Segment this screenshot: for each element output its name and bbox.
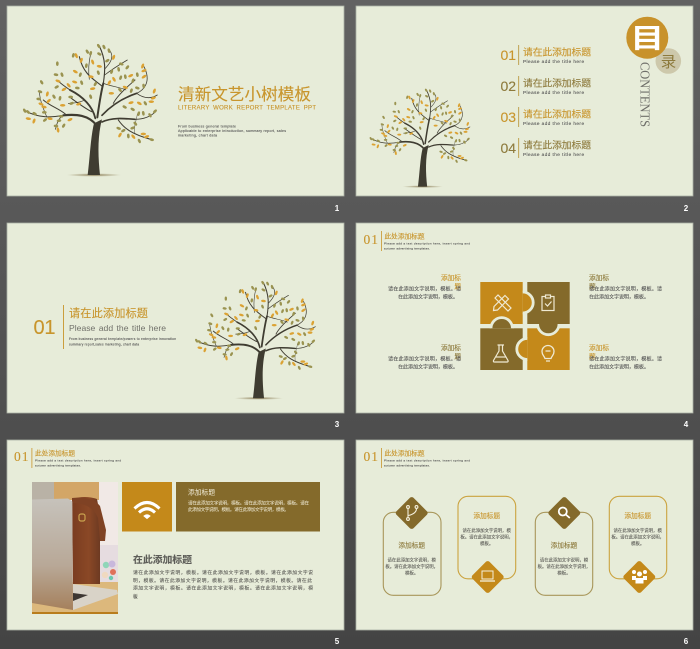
slide 6: four cards xyxy=(356,440,693,630)
tree illustration xyxy=(22,43,158,177)
card 3 xyxy=(535,496,593,595)
description text: Applicable to enterprise introduction, summary report, sales xyxy=(178,129,286,133)
tree illustration xyxy=(369,88,470,188)
card 2: 添加标题 xyxy=(473,511,500,520)
card 1: 板。请在此添加文字说明， xyxy=(385,563,438,570)
contents item 02 xyxy=(500,76,591,96)
slide header: Please add a text description here, insert spring and xyxy=(35,458,121,462)
wifi tile xyxy=(122,482,172,532)
contents item 01: 01 xyxy=(500,47,516,63)
card 1: 模板。 xyxy=(405,570,418,577)
slide header: 此处添加标题 xyxy=(35,448,75,458)
label: top right: 请在此添加文字说明，模板。请 xyxy=(589,286,662,292)
icon: pencil and ruler xyxy=(494,295,511,311)
slide header: autumn advertising templates. xyxy=(384,464,430,468)
slide header: 01 xyxy=(364,449,378,464)
label: top left: 题 xyxy=(454,282,461,290)
brown text tile xyxy=(176,482,320,532)
label: bottom left: 添加标 xyxy=(441,343,461,352)
card 3: 添加标题 xyxy=(551,541,578,550)
label: bottom right: 请在此添加文字说明，模板。请 xyxy=(589,356,662,362)
body paragraph: 板。 xyxy=(133,593,140,600)
label: top left: 添加标 xyxy=(441,273,461,282)
section subtitle: Please add the title here xyxy=(69,323,166,333)
contents item 04 xyxy=(500,138,591,158)
slide number 2: 2 xyxy=(684,204,689,213)
description text xyxy=(178,124,286,138)
slide 3: section divider xyxy=(7,223,344,413)
brown text tile: 此添加文字说明，模板。请在此添加文字说明，模板。 xyxy=(188,506,289,513)
slide header: Please add a text description here, insert spring and xyxy=(384,458,470,462)
contents item 03: Please add the title here xyxy=(523,121,584,126)
contents item 02: 请在此添加标题 xyxy=(523,76,591,90)
contents item 02: Please add the title here xyxy=(523,90,584,95)
body paragraph: 添加文字说明，模板。请在此添加文字说明，模板。请在此添加文字说明，模 xyxy=(133,585,313,592)
section description: summary report,sales marketing, chart data xyxy=(69,342,139,346)
label: bottom left: 请在此添加文字说明，模板。请 xyxy=(388,356,461,362)
icon: light bulb xyxy=(542,346,554,361)
small circle badge xyxy=(656,48,681,74)
contents item 01 xyxy=(500,45,591,65)
icon: laptop xyxy=(480,571,495,581)
large circle badge: 目 xyxy=(630,24,664,54)
label: top left: 请在此添加文字说明，模板。请 xyxy=(388,286,461,292)
label: top right: 在此添加文字说明，模板。 xyxy=(589,294,649,300)
slide header: 01 xyxy=(364,232,378,247)
slide header: autumn advertising templates. xyxy=(35,464,81,468)
icon: branch xyxy=(407,506,418,520)
main title: 清新文艺小树模板 xyxy=(178,85,311,104)
body paragraph xyxy=(133,569,313,600)
slide number 5: 5 xyxy=(335,637,340,646)
contents item 04: Please add the title here xyxy=(523,152,584,157)
label: bottom right: 添加标 xyxy=(589,343,609,352)
slide 1: title slide xyxy=(7,6,344,196)
slide number 6: 6 xyxy=(684,637,689,646)
contents item 03 xyxy=(500,107,591,127)
slide number 3: 3 xyxy=(335,420,340,429)
card 2 xyxy=(458,496,516,594)
body paragraph: 请在此添加文字说明，模板。请在此添加文字说明，模板。请在此添加文字说 xyxy=(133,569,313,576)
section number: 01 xyxy=(34,317,56,339)
english subtitle: LITERARY WORK REPORT TEMPLATE PPT xyxy=(178,106,316,112)
body paragraph: 明，模板。请在此添加文字说明，模板。请在此添加文字说明，模板。请在此 xyxy=(133,577,312,584)
contents item 03: 03 xyxy=(500,109,516,125)
description text: From business general template xyxy=(178,124,236,128)
small circle badge: 录 xyxy=(661,53,676,71)
contents item 01: Please add the title here xyxy=(523,59,584,64)
slide 4: puzzle xyxy=(356,223,693,413)
card 2: 板。请在此添加文字说明， xyxy=(460,533,513,540)
icon: people xyxy=(632,570,647,584)
tree illustration xyxy=(195,280,316,400)
large circle badge xyxy=(626,17,668,59)
slide number 1: 1 xyxy=(335,204,340,213)
divider xyxy=(62,305,65,349)
card 4 xyxy=(609,496,667,594)
label: bottom right xyxy=(589,343,662,370)
label: bottom left: 题 xyxy=(454,352,461,360)
icon: flask xyxy=(493,345,508,362)
card 3: 板。请在此添加文字说明， xyxy=(538,563,590,570)
slide 2: contents xyxy=(356,6,693,196)
card 3: 请在此添加文字说明，模 xyxy=(540,556,589,564)
slide header: 01 xyxy=(14,449,28,464)
brown text tile: 请在此添加文字说明，模板。请在此添加文字说明，模板。请在 xyxy=(188,500,309,506)
body heading: 在此添加标题 xyxy=(133,553,192,566)
icon: magnifier xyxy=(559,508,570,518)
card 1 xyxy=(383,496,441,595)
brown text tile: 添加标题 xyxy=(188,488,215,496)
icon: wifi xyxy=(134,502,160,518)
card 2: 请在此添加文字说明，模 xyxy=(463,527,511,534)
label: top left xyxy=(388,273,461,300)
slide header: autumn advertising templates. xyxy=(384,247,430,251)
section description xyxy=(69,337,176,346)
card 3: 模板。 xyxy=(557,570,571,577)
card 1: 添加标题 xyxy=(398,541,425,550)
card 1: 请在此添加文字说明，模 xyxy=(388,556,436,564)
contents item 03: 请在此添加标题 xyxy=(523,108,591,120)
slide header xyxy=(364,231,470,251)
label: top right xyxy=(589,273,662,300)
card 4: 添加标题 xyxy=(624,511,651,520)
label: bottom right: 在此添加文字说明，模板。 xyxy=(589,364,649,370)
label: top right: 题 xyxy=(589,282,596,290)
photo: laptop and leather bag xyxy=(32,482,118,614)
slide 5: photo and text xyxy=(7,440,344,630)
vertical CONTENTS label: CONTENTS xyxy=(636,62,652,127)
label: bottom right: 题 xyxy=(589,352,596,360)
label: top right: 添加标 xyxy=(589,273,609,282)
slide header: 此处添加标题 xyxy=(384,448,425,458)
slide number 4: 4 xyxy=(684,420,689,429)
label: top left: 在此添加文字说明，模板。 xyxy=(398,294,458,300)
contents item 04: 04 xyxy=(500,140,516,156)
contents item 04: 请在此添加标题 xyxy=(523,138,591,152)
slide header: Please add a text description here, insert spring and xyxy=(384,242,470,246)
card 4: 模板。 xyxy=(631,540,644,547)
slide header xyxy=(14,448,121,468)
puzzle graphic xyxy=(480,282,570,370)
card 4: 板。请在此添加文字说明， xyxy=(611,533,664,540)
card 4: 请在此添加文字说明，模 xyxy=(614,527,662,534)
section title: 请在此添加标题 xyxy=(69,306,148,320)
card 2: 模板。 xyxy=(480,540,493,547)
slide header: 此处添加标题 xyxy=(384,232,425,240)
label: bottom left xyxy=(388,343,461,370)
label: bottom left: 在此添加文字说明，模板。 xyxy=(398,364,458,370)
slide header xyxy=(364,448,470,468)
description text: marketing, chart data xyxy=(178,134,217,138)
contents item 01: 请在此添加标题 xyxy=(523,46,591,58)
section description: From business general template/powers to enterprise innovation xyxy=(69,337,176,341)
icon: clipboard xyxy=(542,295,554,310)
contents item 02: 02 xyxy=(500,78,516,94)
